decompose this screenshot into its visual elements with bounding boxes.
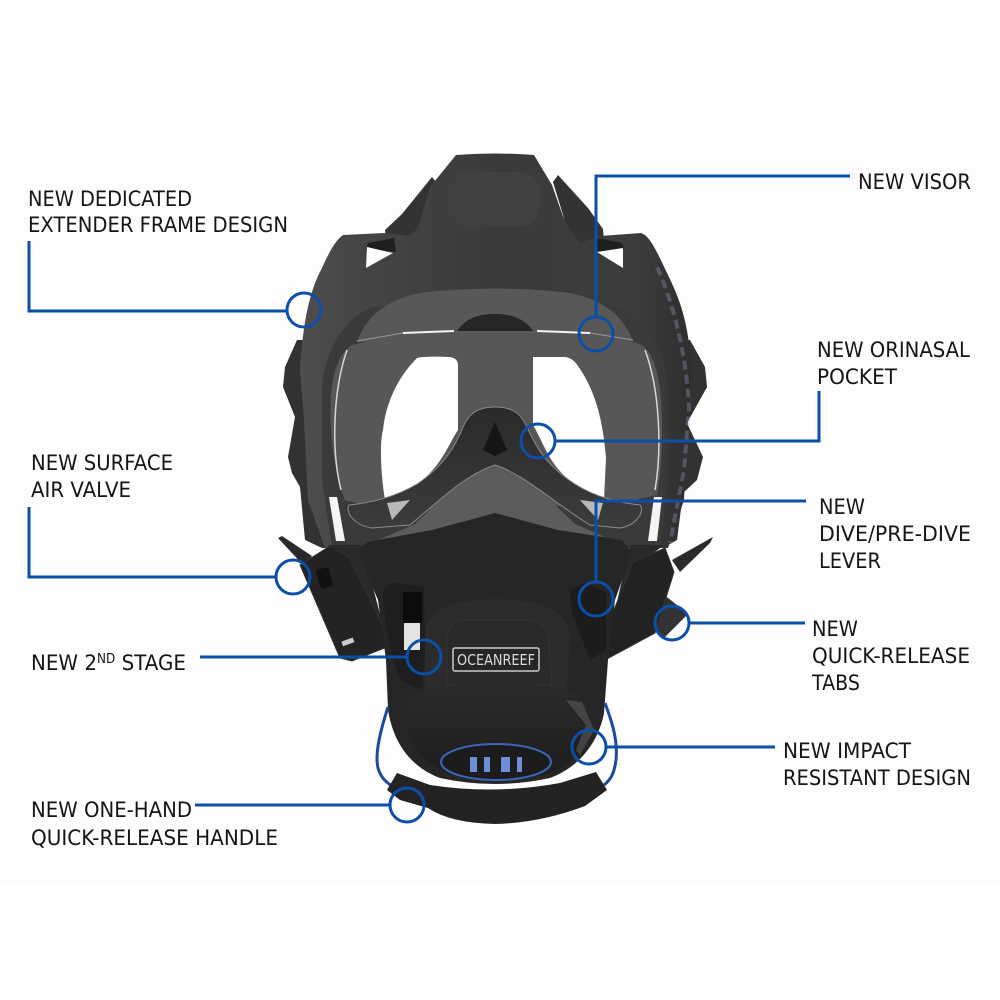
dive lever bbox=[570, 583, 606, 660]
callout: impact resistant design bbox=[572, 730, 971, 791]
marker: dive lever bbox=[579, 582, 613, 616]
label: orinasal pocket: NEW ORINASAL bbox=[817, 338, 970, 363]
marker: orinasal pocket bbox=[521, 424, 555, 458]
fillers between pods and half mask bbox=[328, 545, 664, 650]
leader: quick-release tabs bbox=[689, 622, 805, 624]
right fin bbox=[672, 537, 713, 572]
label: one-hand handle: NEW ONE-HAND bbox=[31, 798, 192, 823]
label: extender frame bbox=[28, 187, 288, 238]
purge button bars bbox=[470, 757, 522, 772]
label: visor: NEW VISOR bbox=[858, 170, 971, 195]
left fin bbox=[278, 536, 312, 566]
frame edge mottled blue print on the right bbox=[657, 267, 689, 543]
OCEANREEF logo bbox=[453, 648, 539, 671]
purge button oval bbox=[441, 744, 551, 780]
callout: visor bbox=[579, 170, 971, 351]
label: one-hand handle: QUICK-RELEASE HANDLE bbox=[31, 826, 278, 851]
leader: surface air valve bbox=[29, 507, 276, 577]
visor highlights bbox=[335, 331, 659, 490]
callout: extender frame bbox=[28, 187, 321, 327]
clear triangles bbox=[387, 500, 603, 520]
label: dive lever: LEVER bbox=[819, 549, 881, 574]
leader: second stage bbox=[200, 656, 407, 658]
side buckles silhouette bbox=[283, 340, 707, 548]
leader: impact resistant design bbox=[606, 746, 775, 748]
head strap wings bbox=[385, 175, 604, 245]
label: dive lever: DIVE/PRE-DIVE bbox=[819, 522, 971, 547]
top pad bbox=[449, 172, 540, 227]
centre arch plate bbox=[425, 599, 570, 690]
label: second stage: STAGE bbox=[115, 651, 186, 676]
visor dark notch bbox=[457, 314, 533, 331]
label: quick-release tabs: NEW bbox=[812, 617, 858, 642]
triangular frame openings bbox=[366, 247, 623, 268]
label: second stage: ND bbox=[97, 652, 115, 667]
label: surface air valve: AIR VALVE bbox=[31, 478, 131, 503]
skirt gaps bbox=[329, 497, 662, 541]
lens cutouts bbox=[381, 357, 606, 500]
right tab bbox=[652, 597, 688, 638]
right housing bbox=[602, 548, 674, 660]
marker: second stage bbox=[407, 640, 441, 674]
left lower slot bbox=[341, 637, 354, 646]
leader: dive lever bbox=[596, 501, 806, 582]
strap shadow behind openings bbox=[366, 238, 624, 252]
callout: second stage bbox=[31, 640, 441, 676]
marker: quick-release tabs bbox=[655, 606, 689, 640]
extender frame bbox=[300, 154, 692, 548]
left buckle detail bbox=[316, 567, 333, 589]
label: quick-release tabs bbox=[811, 617, 970, 696]
lens bbox=[331, 333, 662, 510]
lower grey nose panel bbox=[360, 468, 630, 548]
second stage ribbed valve bbox=[404, 623, 420, 650]
left side pod bbox=[278, 536, 392, 661]
orinasal pocket bbox=[348, 407, 642, 528]
dark regulator opening bbox=[403, 592, 422, 623]
right side pod bbox=[602, 537, 713, 660]
label: dive lever: NEW bbox=[819, 495, 865, 520]
logo arch bbox=[447, 620, 552, 685]
label: second stage: NEW 2 bbox=[31, 651, 102, 676]
marker: extender frame bbox=[287, 293, 321, 327]
label: impact resistant design bbox=[783, 739, 971, 791]
quick-release handle bbox=[387, 772, 607, 824]
callout: one-hand handle bbox=[31, 788, 424, 851]
impact cover bbox=[408, 682, 589, 781]
leader: orinasal pocket bbox=[555, 391, 819, 441]
label: impact resistant design: RESISTANT DESIGN bbox=[783, 766, 971, 791]
callout: surface air valve bbox=[29, 451, 310, 594]
label: orinasal pocket bbox=[817, 338, 970, 390]
clear skirt bbox=[322, 307, 668, 548]
label: quick-release tabs: TABS bbox=[811, 671, 860, 696]
callout: orinasal pocket bbox=[521, 338, 970, 458]
impact texture highlight bbox=[566, 700, 594, 755]
visor bbox=[357, 288, 633, 342]
leader: extender frame bbox=[29, 241, 287, 311]
half mask and chin body bbox=[358, 513, 632, 784]
mask illustration bbox=[278, 154, 713, 824]
second stage slot bbox=[383, 583, 425, 690]
label: extender frame: EXTENDER FRAME DESIGN bbox=[28, 213, 288, 238]
label: one-hand handle bbox=[31, 798, 278, 851]
label: surface air valve bbox=[31, 451, 173, 503]
marker: surface air valve bbox=[276, 560, 310, 594]
label: extender frame: NEW DEDICATED bbox=[28, 187, 192, 212]
label: surface air valve: NEW SURFACE bbox=[31, 451, 173, 476]
label: quick-release tabs: QUICK-RELEASE bbox=[812, 644, 970, 669]
leader: visor bbox=[596, 176, 850, 317]
label: impact resistant design: NEW IMPACT bbox=[783, 739, 912, 764]
label: orinasal pocket: POCKET bbox=[817, 365, 898, 390]
leader: one-hand handle bbox=[195, 804, 390, 806]
callout: dive lever bbox=[579, 495, 971, 616]
orinasal centre bbox=[483, 422, 507, 456]
marker: visor bbox=[579, 317, 613, 351]
marker: one-hand handle bbox=[390, 788, 424, 822]
OCEANREEF logo: OCEANREEF bbox=[457, 651, 535, 669]
blue handle cords bbox=[377, 703, 616, 786]
callout: quick-release tabs bbox=[655, 606, 970, 696]
label: dive lever bbox=[819, 495, 971, 574]
left housing bbox=[300, 546, 392, 661]
marker: impact resistant design bbox=[572, 730, 606, 764]
